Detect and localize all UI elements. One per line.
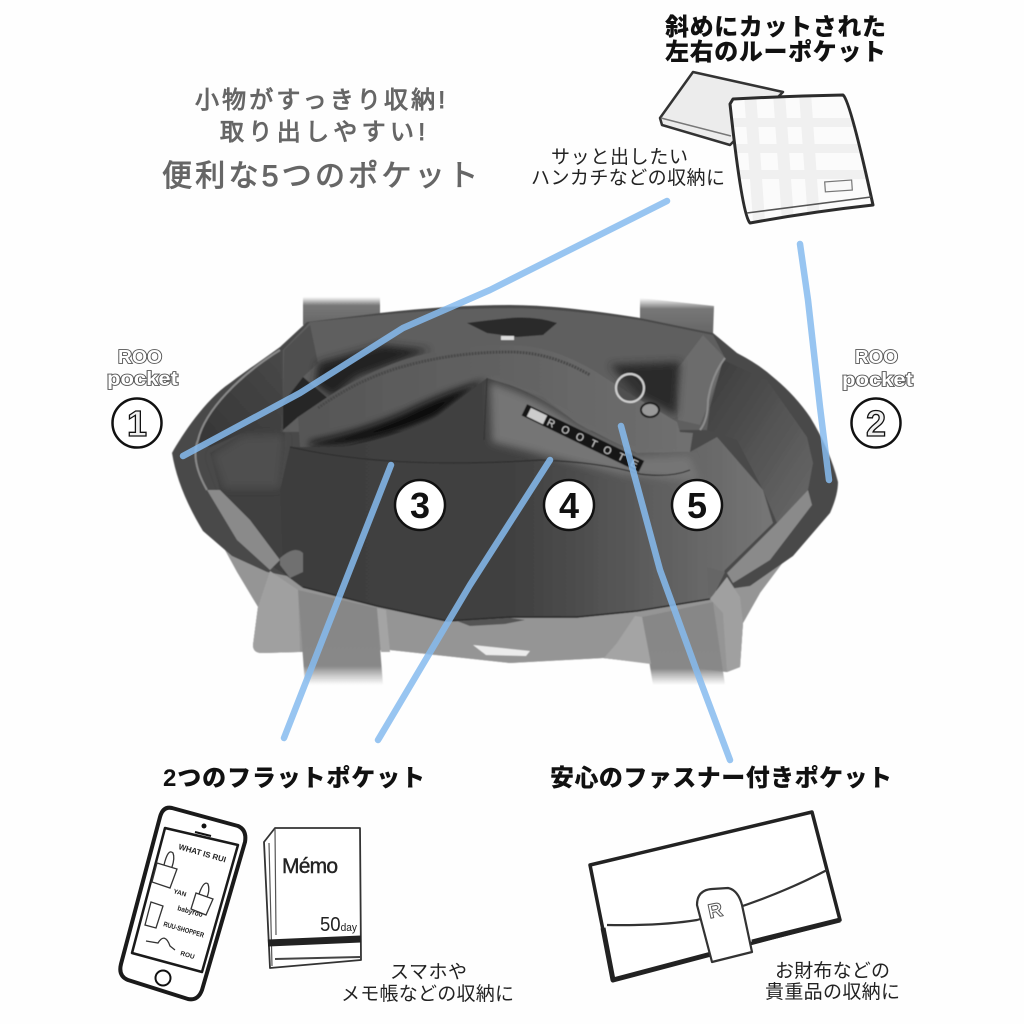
front rim <box>303 587 710 621</box>
brand tag <box>521 404 644 473</box>
icon: memo book: 50day <box>320 914 357 936</box>
title block <box>162 87 478 193</box>
back wall shadow left <box>315 345 430 397</box>
rim handle patch <box>467 318 557 337</box>
caption: phone and memo <box>341 961 514 1005</box>
right roo pocket <box>707 360 813 523</box>
icon: wallet: R <box>706 899 725 923</box>
left roo pocket <box>197 352 283 447</box>
number badge 4 <box>544 480 594 530</box>
icon: smartphone: ROU <box>179 950 196 961</box>
back handles <box>303 297 714 334</box>
number badge 3 <box>395 480 445 530</box>
front strip <box>253 573 760 672</box>
heading: roo pocket: 左右のルーポケット <box>665 39 886 66</box>
icon: smartphone: babyroo <box>176 905 203 919</box>
icon: smartphone: YAN <box>172 888 187 899</box>
title block: 小物がすっきり収納! <box>195 87 445 114</box>
left front tab <box>253 571 300 653</box>
pocket 3 opening shadow <box>310 380 487 447</box>
caption: wallet: 貴重品の収納に <box>765 981 900 1003</box>
label: roo pocket 1 <box>107 347 179 448</box>
left lining edge <box>195 350 280 490</box>
zipper seam <box>318 352 590 408</box>
pocket edge <box>290 447 690 475</box>
left lining <box>210 432 285 573</box>
heading: flat pockets: 2つのフラットポケット <box>163 765 425 792</box>
caption: handkerchief: ハンカチなどの収納に <box>531 167 725 189</box>
gusset right <box>675 335 725 425</box>
heading: roo pocket <box>665 14 886 66</box>
mesh <box>457 618 525 626</box>
bag photo <box>172 297 838 685</box>
caption: handkerchief: サッと出したい <box>551 146 688 168</box>
zipper pocket <box>298 345 693 453</box>
icon: memo book: Mémo <box>282 855 338 878</box>
icon: smartphone: WHAT IS RUI <box>177 842 227 864</box>
number badge 3: 3 <box>410 485 430 526</box>
label: roo pocket 1: 1 <box>127 403 147 444</box>
title block: 便利な5つのポケット <box>162 160 478 193</box>
right inner knob <box>707 567 725 597</box>
number badge 4: 4 <box>559 485 579 526</box>
label: roo pocket 2 <box>842 347 914 448</box>
icon: smartphone: RUU-SHOPPER <box>162 921 205 939</box>
icon: wallet <box>590 812 840 980</box>
front webbing <box>377 608 651 664</box>
panel highlight <box>490 382 700 482</box>
caption: phone and memo: メモ帳などの収納に <box>341 983 514 1005</box>
crease <box>484 378 487 440</box>
icon: folded towels <box>660 72 873 223</box>
number badge 5 <box>672 480 722 530</box>
outer shell <box>172 305 838 620</box>
back wall shadow right <box>610 362 680 415</box>
interior pockets <box>280 378 773 622</box>
zipper ring and pull <box>616 374 659 417</box>
back wall <box>283 308 725 432</box>
dark gusset left <box>283 377 330 430</box>
right front tab <box>710 577 743 672</box>
icon: memo book <box>264 828 361 968</box>
label: roo pocket 1: pocket <box>107 369 179 390</box>
number badge 5: 5 <box>687 485 707 526</box>
caption: wallet: お財布などの <box>775 960 890 982</box>
caption: wallet <box>765 960 900 1003</box>
brand tag: ROOTOTE <box>545 417 640 471</box>
caption: handkerchief <box>531 146 725 189</box>
left inner knob <box>280 550 303 578</box>
heading: roo pocket: 斜めにカットされた <box>665 14 886 41</box>
leader lines <box>183 201 829 760</box>
light lining bands <box>207 490 280 570</box>
gusset left <box>283 325 318 403</box>
label: roo pocket 2: 2 <box>866 403 886 444</box>
front handles <box>298 590 725 685</box>
label: roo pocket 2: pocket <box>842 370 914 391</box>
icon: smartphone <box>120 808 245 999</box>
heading: zipper pocket: 安心のファスナー付きポケット <box>550 765 892 792</box>
title block: 取り出しやすい! <box>220 119 425 146</box>
right pocket edge <box>700 358 725 430</box>
label: roo pocket 1: ROO <box>118 347 162 367</box>
label: roo pocket 2: ROO <box>855 347 898 367</box>
lower body outer <box>225 500 790 672</box>
caption: phone and memo: スマホや <box>390 961 467 983</box>
front label <box>473 645 530 656</box>
